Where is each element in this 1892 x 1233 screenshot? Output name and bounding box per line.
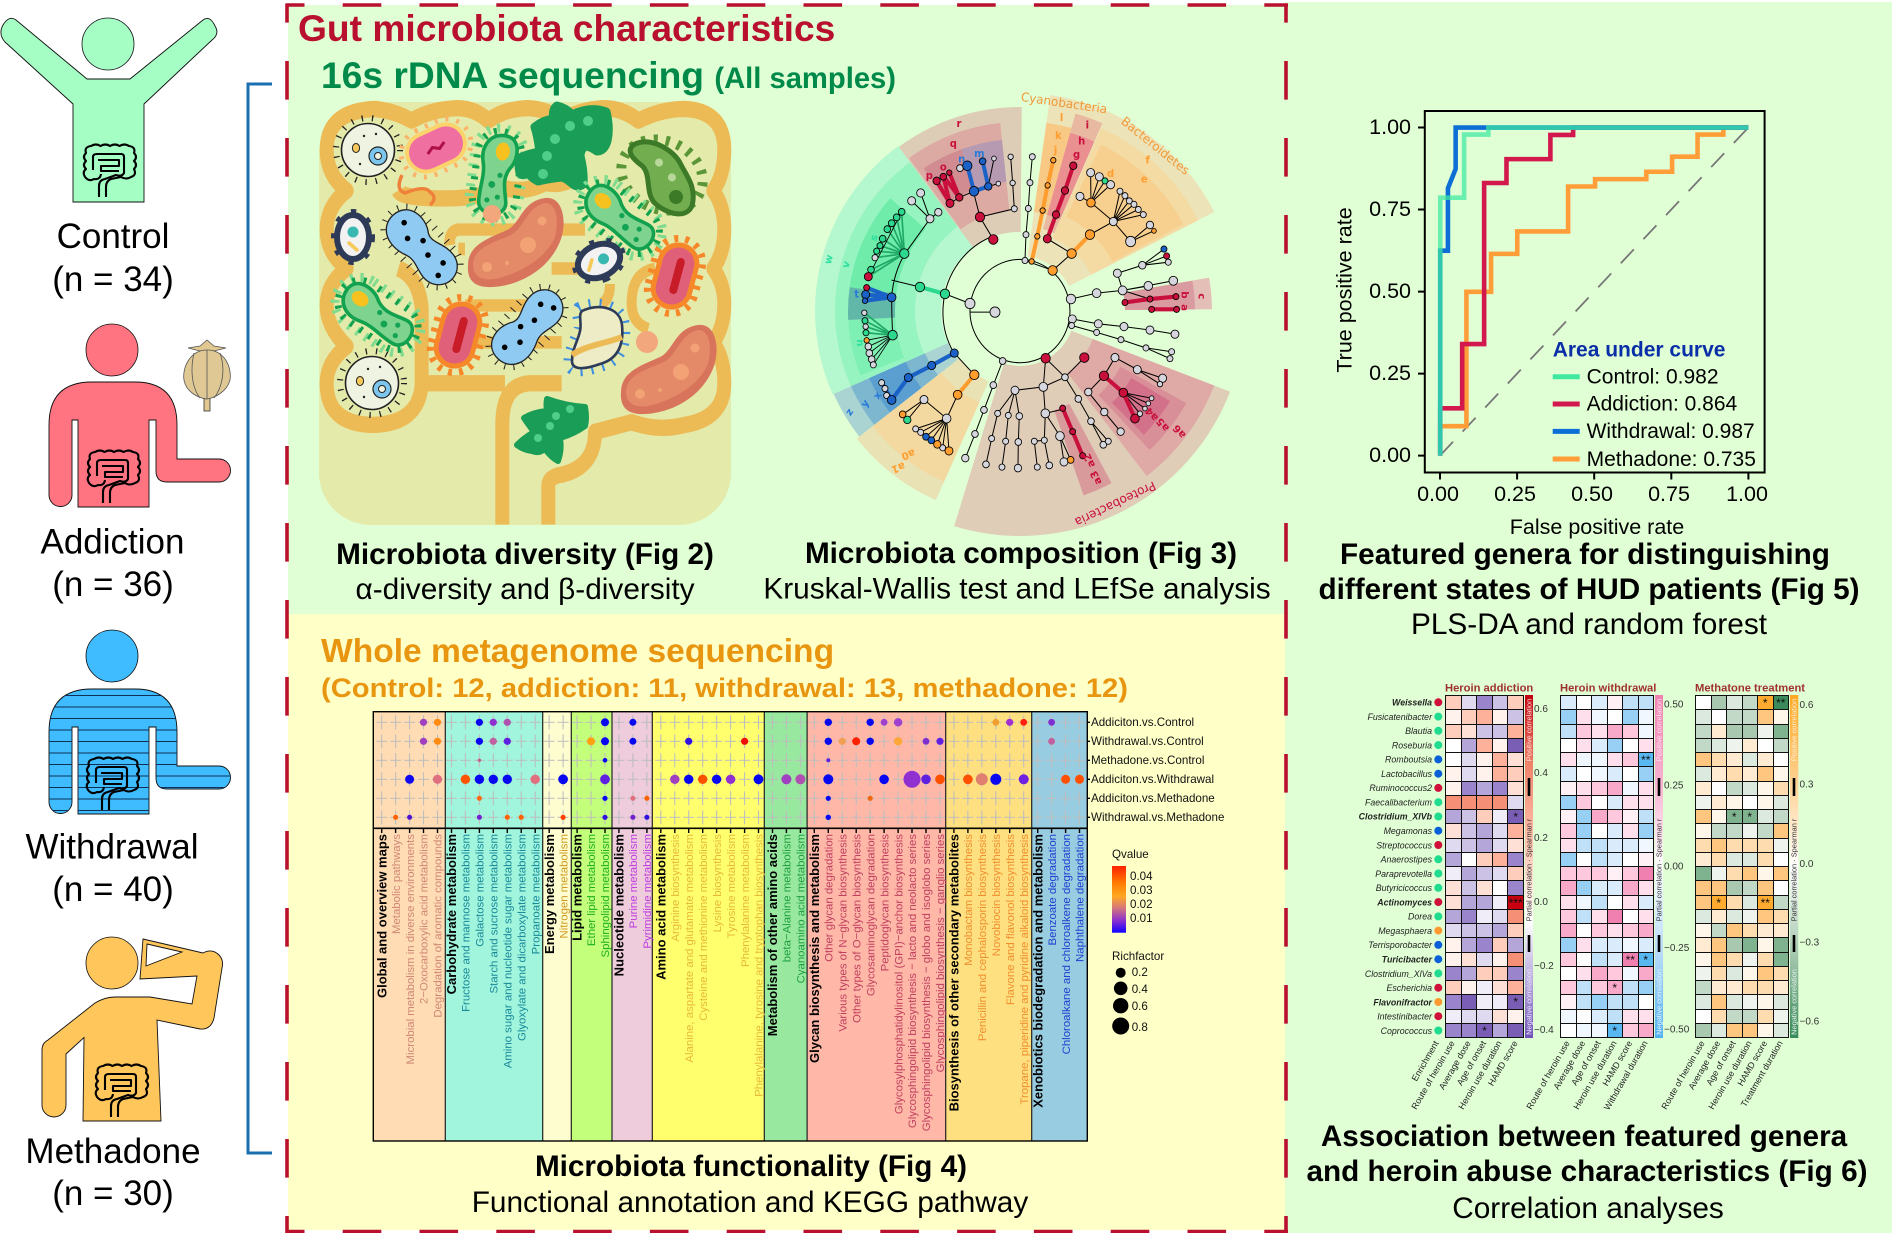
pathway labels: Xenobiotics biodegradation and metabolism (1030, 834, 1045, 1108)
ROC legend: Control: 0.982 (1587, 365, 1719, 388)
ROC axis labels: 0.50 (1369, 279, 1411, 303)
heatmap column labels: Heroin use duration (1571, 1039, 1619, 1111)
heatmap colour bar values: 0.0 (1534, 897, 1548, 908)
clade letter labels: j (1053, 145, 1057, 156)
clade letter labels: a5 (1155, 415, 1172, 433)
caption: microbiota diversity (336, 538, 714, 606)
heatmap colour bars: Partial correlation · Spearman r (1790, 818, 1799, 921)
figure: control group: (n = 34) (52, 260, 174, 299)
bubbles (393, 718, 1084, 820)
heatmap column labels (1409, 1039, 1785, 1112)
pathway labels: Nucleotide metabolism (612, 834, 626, 976)
pathway labels: Glycosylphosphatidylinositol (GPI)−anchor biosynthesis (893, 834, 905, 1114)
heatmap genus labels: Ruminococcus2 (1369, 783, 1432, 793)
heatmap column labels: Route of heroin use (1659, 1039, 1707, 1111)
heading: whole metagenome sequencing: Whole metagenome sequencing (321, 633, 834, 670)
pathway labels: Tropane, piperidine and pyridine alkaloid biosynthesis (1019, 834, 1031, 1105)
ROC legend: Addiction: 0.864 (1587, 393, 1738, 416)
pathway labels: Glycosphingolipid biosynthesis − ganglio series (935, 834, 947, 1072)
illustration: gut with microbes (319, 102, 731, 525)
heatmap colour bar values: 0.3 (1800, 780, 1814, 790)
ROC legend: Withdrawal: 0.987 (1587, 420, 1755, 443)
heatmap genus labels: Romboutsia (1385, 755, 1432, 765)
legend: Qvalue colour scale: 0.04 (1130, 870, 1153, 883)
heatmap: heroin withdrawal (1560, 695, 1654, 1038)
pathway labels: Various types of N−glycan biosynthesis (838, 834, 850, 1032)
heatmap genus labels: Megamonas (1384, 826, 1433, 836)
heatmap genus labels: Dorea (1408, 912, 1432, 922)
figure: control group (1, 18, 217, 299)
clade letter labels: d (1107, 169, 1114, 180)
heatmap column labels: Age of onset (1455, 1039, 1488, 1087)
clade letter labels: c (1195, 293, 1206, 299)
heatmap genus labels: Butyricicoccus (1376, 883, 1433, 893)
heatmap colour bar values: 0.2 (1534, 833, 1548, 844)
clade letter labels: k (1055, 131, 1062, 142)
comparison row labels: Withdrawal.vs.Methadone (1091, 811, 1224, 824)
heatmap colour bars: Negative correlation (1655, 969, 1664, 1035)
cladogram: LEfSe composition (810, 90, 1230, 529)
pathway group backgrounds (373, 712, 1087, 1141)
pathway labels: Glyoxylate and dicarboxylate metabolism (516, 834, 528, 1041)
legend: Richfactor sizes: Richfactor (1112, 950, 1164, 963)
ROC axes ticks (1418, 128, 1748, 480)
ROC axis labels: 0.00 (1417, 482, 1459, 506)
ROC axis labels (1332, 115, 1768, 539)
pathway labels: Lipid metabolism (570, 834, 585, 941)
heatmap: methadone treatment (1695, 695, 1789, 1038)
legend: Qvalue colour scale: Qvalue (1112, 848, 1149, 861)
heading: whole metagenome sequencing: (Control: 12, addiction: 11, withdrawal: 13, methadone: 12) (321, 673, 1128, 703)
caption: microbiota composition: Kruskal-Wallis test and LEfSe analysis (763, 572, 1271, 606)
heatmap colour bar values: 0.00 (1664, 862, 1684, 872)
clade letter labels: f (1145, 156, 1150, 167)
caption: microbiota functionality: Functional annotation and KEGG pathway (472, 1186, 1028, 1219)
ROC axis labels: 0.25 (1369, 361, 1411, 385)
microbes (325, 106, 717, 461)
ROC axis labels: 0.50 (1571, 482, 1613, 506)
caption: association analysis: and heroin abuse characteristics (Fig 6) (1307, 1155, 1867, 1188)
heatmap colour bar values: −0.6 (1800, 1016, 1820, 1028)
heatmap column labels: Average dose (1686, 1039, 1722, 1091)
comparison row labels: Methadone.vs.Control (1091, 754, 1204, 767)
pathway labels: Other glycan degradation (824, 834, 836, 962)
amoeba large (519, 106, 608, 186)
pathway labels: Benzoate degradation (1047, 834, 1059, 945)
legend: Qvalue colour scale: 0.03 (1130, 884, 1153, 897)
caption: microbiota functionality (472, 1150, 1028, 1219)
amoeba small (517, 399, 586, 461)
heatmap column labels: HAMD score (1486, 1039, 1520, 1088)
pathway labels: Lysine biosynthesis (712, 834, 724, 932)
heatmap column labels: Heroin use duration (1706, 1039, 1754, 1111)
figure: addiction group with poppy (41, 324, 230, 604)
pathway labels: Phenylalanine metabolism (740, 834, 752, 967)
clade letter labels: g (1073, 150, 1080, 161)
clade letter labels: i (1086, 120, 1089, 132)
pathway labels: Flavone and flavonol biosynthesis (1005, 834, 1017, 1005)
heatmap colour bar values: −0.2 (1534, 961, 1554, 972)
heatmap colour bar values: 0.4 (1534, 768, 1548, 779)
caption: featured genera: different states of HUD patients (Fig 5) (1318, 573, 1860, 606)
clade letter labels: a3 (1089, 469, 1105, 486)
heatmap genus labels: Weissella (1392, 698, 1432, 708)
heatmap genus labels: Coprococcus (1381, 1026, 1433, 1036)
clade letter labels: b (1179, 291, 1189, 299)
colon tube (327, 108, 724, 525)
heatmap colour bar values: −0.3 (1800, 938, 1820, 948)
heatmap colour bar values: 0.6 (1534, 704, 1548, 715)
pathway labels: Novobiocin biosynthesis (991, 834, 1003, 956)
clade letter labels: r (957, 119, 961, 130)
heatmap titles: Heroin withdrawal (1560, 682, 1656, 694)
caption: association analysis: Correlation analyses (1452, 1192, 1724, 1225)
bracket linking groups to analyses (248, 84, 272, 1153)
pathway labels: Peptidoglycan biosynthesis (879, 834, 891, 971)
clade letter labels: a1 (890, 459, 906, 475)
legend: Richfactor sizes: 0.8 (1132, 1021, 1148, 1034)
clade letter labels: s (869, 233, 881, 243)
pathway labels: Fructose and mannose metabolism (461, 834, 473, 1012)
clade letter labels: t (854, 289, 859, 300)
pathway labels: Cysteine and methionine metabolism (698, 834, 710, 1021)
heatmap genus labels: Roseburia (1392, 740, 1432, 750)
clade letter labels: m (974, 149, 985, 160)
clade letter labels: a6 (1171, 422, 1189, 440)
legend: Qvalue colour scale: 0.01 (1130, 912, 1153, 925)
pathway labels: Starch and sucrose metabolism (488, 834, 500, 994)
pathway labels: Amino acid metabolism (653, 834, 668, 980)
heatmap column labels: Age of onset (1569, 1039, 1603, 1087)
caption: microbiota composition: Microbiota composition (Fig 3) (805, 537, 1237, 570)
heatmap column labels: Average dose (1551, 1039, 1587, 1091)
figure: methadone group drinking (25, 937, 223, 1213)
heatmap colour bars: Negative correlation (1790, 969, 1799, 1035)
gut microbiota dashed frame (286, 4, 1288, 1233)
heatmap genus labels: Clostridium_XlVb (1359, 812, 1433, 822)
clade letter labels: v (841, 260, 853, 270)
clade letter labels: x (872, 390, 885, 402)
bubble chart: KEGG pathway functionality (373, 712, 1224, 1141)
figure: addiction group with poppy: Addiction (41, 522, 184, 562)
clade letter labels: Proteobacteria (1073, 478, 1158, 529)
heatmap column labels: Heroin use duration (1456, 1039, 1504, 1111)
figure: methadone group drinking: (n = 30) (52, 1174, 174, 1213)
pathway labels: 2−Oxocarboxylic acid metabolism (419, 834, 431, 1004)
caption: association analysis (1307, 1120, 1867, 1225)
heatmap colour bar values: 0.6 (1800, 700, 1814, 711)
caption: microbiota diversity: α-diversity and β-diversity (355, 573, 695, 606)
pathway labels: Naphthalene degradation (1075, 834, 1087, 962)
heatmap genus labels: Lactobacillus (1381, 769, 1433, 779)
heatmap colour bar values: 0.0 (1800, 859, 1814, 870)
ROC axis labels: False positive rate (1510, 515, 1684, 539)
heatmap colour bar values: −0.25 (1664, 943, 1690, 954)
heatmap column labels: Average dose (1437, 1039, 1473, 1091)
pathway labels: Microbial metabolism in diverse environments (405, 834, 417, 1064)
ROC legend (1553, 339, 1756, 471)
clade letter labels: o (940, 162, 947, 174)
legend: Richfactor sizes: 0.2 (1132, 966, 1148, 979)
comparison row labels (1091, 716, 1224, 824)
heatmap genus labels: Clostridium_XlVa (1365, 969, 1432, 979)
ROC axis labels: 0.00 (1369, 443, 1411, 467)
clade letter labels: h (1078, 137, 1085, 148)
clade letter labels: e (1141, 174, 1148, 186)
clade letter labels: a (1179, 304, 1189, 311)
pathway labels: Energy metabolism (542, 834, 557, 954)
heatmap genus labels: Terrisporobacter (1368, 940, 1433, 950)
figure: withdrawal group: (n = 40) (52, 870, 174, 909)
heatmap colour bars: Positive correlation (1790, 699, 1799, 761)
figure: withdrawal group (25, 630, 230, 909)
heatmap: heroin addiction (1445, 695, 1524, 1038)
ROC axis labels: 1.00 (1369, 115, 1411, 139)
figure: control group: Control (57, 217, 169, 256)
caption: microbiota functionality: Microbiota functionality (Fig 4) (535, 1150, 967, 1183)
pathway labels: Chloroalkane and chloroalkene degradation (1061, 834, 1073, 1054)
ROC axis labels: 0.75 (1369, 197, 1411, 221)
heatmap genus labels: Fusicatenibacter (1367, 712, 1433, 722)
caption: featured genera: Featured genera for distinguishing (1340, 538, 1830, 571)
heatmap column labels: HAMD score (1600, 1039, 1634, 1088)
caption: association analysis: Association between featured genera (1321, 1120, 1848, 1153)
caption: microbiota composition (763, 537, 1271, 606)
heatmap titles (1445, 682, 1805, 694)
pathway labels: Arginine biosynthesis (670, 834, 682, 942)
genus enrichment dots (1434, 698, 1442, 1034)
ROC axis labels: True positive rate (1332, 207, 1356, 373)
heatmap colour bars: Positive correlation (1655, 699, 1664, 761)
heatmap genus labels (1359, 698, 1433, 1036)
heatmap column labels: Age of onset (1704, 1039, 1738, 1087)
ROC legend: Methadone: 0.735 (1587, 448, 1756, 471)
pathway labels: Amino sugar and nucleotide sugar metabolism (502, 834, 514, 1068)
ROC axis labels: 0.75 (1648, 482, 1690, 506)
pathway labels: Penicillin and cephalosporin biosynthesis (977, 834, 989, 1041)
pathway labels: Galactose metabolism (475, 834, 487, 947)
heatmap column labels: Withdrawal duration (1602, 1039, 1650, 1112)
heatmap genus labels: Turicibacter (1382, 954, 1433, 964)
pathway labels: Sphingolipid metabolism (600, 834, 612, 957)
clade letter labels: Bacteroidetes (1118, 114, 1192, 178)
heatmap colour bar values: 0.50 (1664, 700, 1684, 710)
legend: Qvalue colour scale: 0.02 (1130, 898, 1153, 911)
comparison row labels: Addiciton.vs.Methadone (1091, 792, 1215, 805)
pathway labels: Monobactam biosynthesis (963, 834, 975, 966)
clade letter labels: y (859, 398, 872, 410)
heatmap genus labels: Megasphaera (1378, 926, 1432, 936)
heatmap titles: Methatone treatment (1695, 682, 1805, 694)
pathway labels (374, 834, 1087, 1131)
heatmap column labels: Route of heroin use (1524, 1039, 1572, 1111)
heatmap colour bar values: 0.25 (1664, 780, 1684, 792)
clade letter labels: a4 (1144, 405, 1161, 423)
figure: addiction group with poppy: (n = 36) (52, 565, 174, 604)
pathway labels: Ether lipid metabolism (586, 834, 598, 946)
caption: microbiota diversity: Microbiota diversity (Fig 2) (336, 538, 714, 571)
ROC axis labels: 1.00 (1726, 482, 1768, 506)
pathway labels: Tyrosine metabolism (726, 834, 738, 938)
clade letter labels: Cyanobacteria (1020, 90, 1108, 116)
ROC chart (1332, 111, 1768, 539)
ROC axis labels: 0.25 (1494, 482, 1536, 506)
pathway labels: Global and overview maps (374, 834, 389, 998)
heatmap column labels: Enrichment (1410, 1039, 1441, 1083)
ROC curves (1440, 128, 1748, 456)
caption: featured genera (1318, 538, 1860, 641)
pathway labels: Glycosphingolipid biosynthesis − lacto and neolacto series (907, 834, 919, 1128)
pathway labels: beta−Alanine metabolism (782, 834, 794, 962)
heading: 16s rDNA sequencing: 16s rDNA sequencing (All samples) (321, 54, 896, 96)
heatmap genus labels: Faecalibacterium (1365, 797, 1432, 807)
clade letter labels: p (926, 171, 933, 182)
heatmap colour bars: Positive correlation (1525, 699, 1534, 761)
heatmap colour bars: Partial correlation · Spearman r (1525, 818, 1534, 921)
pathway labels: Glycan biosynthesis and metabolism (807, 834, 822, 1063)
figure: methadone group drinking: Methadone (25, 1132, 201, 1171)
heatmap genus labels: Actinomyces (1376, 897, 1432, 907)
heading: whole metagenome sequencing (321, 633, 1128, 703)
clade letter labels: w (823, 253, 836, 266)
pathway labels: Biosynthesis of other secondary metabolites (946, 834, 962, 1111)
legend: Richfactor sizes: 0.4 (1132, 983, 1148, 996)
pathway labels: Metabolic pathways (391, 834, 403, 934)
pathway labels: Phenylalanine, tyrosine and tryptophan biosynthesis (754, 834, 766, 1097)
clade letter labels: z (844, 407, 856, 418)
pathway labels: Carbohydrate metabolism (444, 834, 459, 994)
main title: Gut microbiota characteristics (298, 7, 835, 49)
comparison row labels: Withdrawal.vs.Control (1091, 735, 1204, 748)
comparison row labels: Addiciton.vs.Withdrawal (1091, 773, 1214, 786)
legend: Richfactor sizes (1112, 950, 1164, 1034)
heatmap genus labels: Streptococcus (1376, 840, 1433, 850)
pathway labels: Cyanoamino acid metabolism (796, 834, 808, 983)
pathway labels: Other types of O−glycan biosynthesis (851, 834, 863, 1023)
tree branches and nodes (823, 90, 1206, 529)
axis ticks (382, 722, 1090, 833)
clade letter labels: q (950, 139, 957, 150)
legend: Richfactor sizes: 0.6 (1132, 1000, 1148, 1013)
pathway labels: Degradation of aromatic compounds (433, 834, 445, 1018)
heatmap colour bars: Negative correlation (1525, 969, 1534, 1035)
heatmap colour bar values: −0.4 (1534, 1025, 1554, 1036)
pathway labels: Propanoate metabolism (530, 834, 542, 954)
legend: Qvalue colour scale (1112, 848, 1153, 933)
ROC legend: Area under curve (1553, 339, 1725, 362)
clade letter labels: l (1060, 113, 1063, 124)
heatmap genus labels: Intestinibacter (1377, 1012, 1433, 1022)
heatmap titles: Heroin addiction (1445, 682, 1533, 694)
heatmap colour bar values: −0.50 (1664, 1024, 1690, 1036)
ROC diagonal (1440, 128, 1748, 456)
pathway labels: Metabolism of other amino acids (765, 834, 780, 1036)
caption: featured genera: PLS-DA and random forest (1411, 608, 1768, 641)
heatmap genus labels: Paraprevotella (1375, 869, 1432, 879)
pathway labels: Purine metabolism (628, 834, 640, 928)
heatmap column labels: HAMD score (1735, 1039, 1769, 1088)
heatmap column labels: Treatment duration (1739, 1039, 1785, 1109)
pathway labels: Alanine, aspartate and glutamate metabolism (684, 834, 696, 1063)
pathway labels: Pyrimidine metabolism (642, 834, 654, 949)
clade letter labels: a2 (1082, 451, 1098, 469)
heatmap genus labels: Flavonifractor (1373, 997, 1433, 1007)
pathway labels: Glycosphingolipid biosynthesis − globo and isoglobo series (921, 834, 933, 1131)
pathway labels: Glycosaminoglycan degradation (865, 834, 877, 996)
pathway labels: Nitrogen metabolism (558, 834, 570, 938)
figure: withdrawal group: Withdrawal (25, 828, 199, 866)
clade letter labels (823, 90, 1206, 529)
heatmap genus labels: Anaerostipes (1380, 854, 1433, 864)
heatmap column labels: Route of heroin use (1409, 1039, 1457, 1111)
comparison row labels: Addiciton.vs.Control (1091, 716, 1194, 729)
clade letter labels: n (958, 154, 965, 165)
heatmap colour bars (1525, 695, 1799, 1038)
clade letter labels: u (855, 339, 866, 346)
heatmap colour bar values (1534, 700, 1820, 1036)
icon: poppy capsule (184, 340, 230, 411)
clade letter labels: a0 (900, 446, 916, 462)
heatmap genus labels: Blautia (1405, 726, 1432, 736)
heatmap genus labels: Escherichia (1387, 983, 1432, 993)
heatmap colour bars: Partial correlation · Spearman r (1655, 818, 1664, 921)
clade shading sectors (810, 101, 1230, 521)
